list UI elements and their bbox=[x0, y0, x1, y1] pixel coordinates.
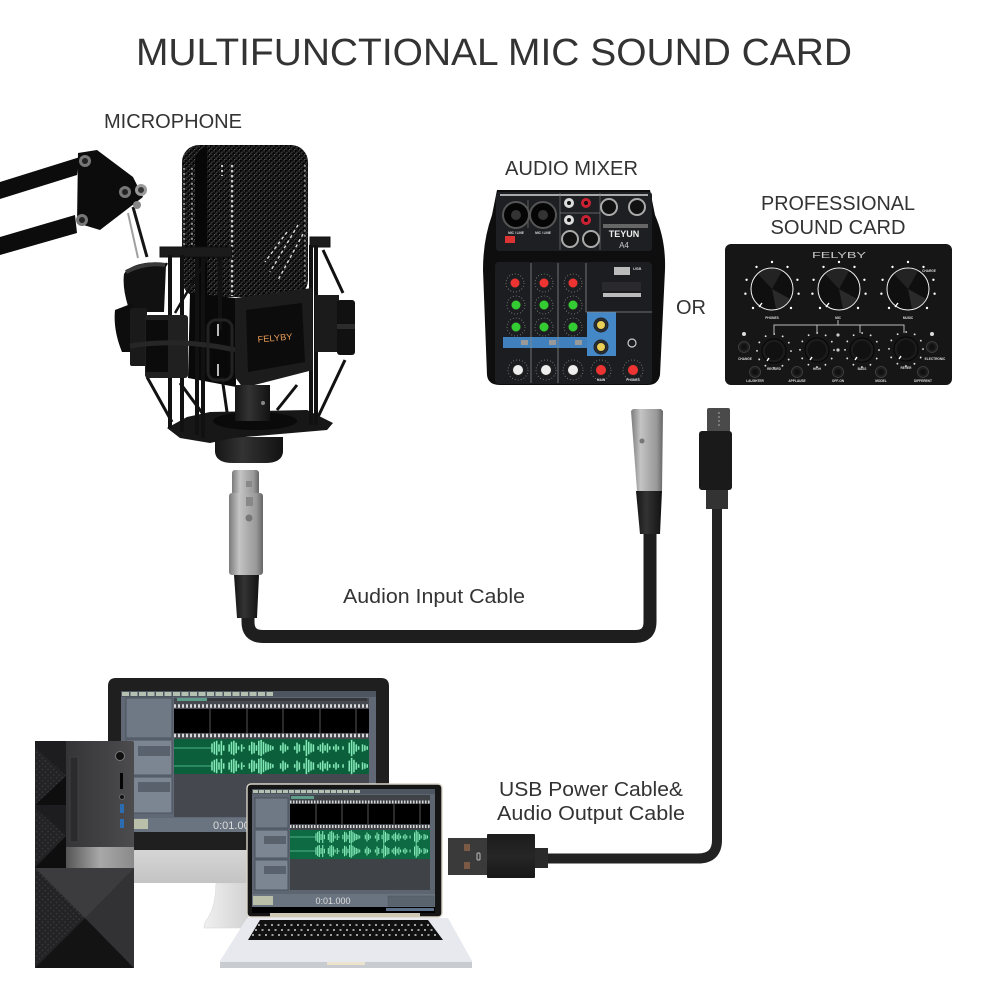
card control labels: MUSIC bbox=[903, 316, 914, 320]
main knobs bbox=[745, 262, 935, 310]
connector brackets bbox=[774, 320, 904, 333]
top input panel bbox=[496, 192, 652, 251]
card body bbox=[725, 244, 952, 385]
shock mount frame and rods bbox=[140, 237, 345, 433]
card control labels: MODEL bbox=[875, 379, 887, 383]
card control labels bbox=[738, 269, 946, 383]
channel strip panel: PHONES bbox=[626, 378, 640, 382]
label: audio mixer: AUDIO MIXER bbox=[505, 158, 638, 180]
top input panel: MIC / LINE bbox=[508, 231, 524, 235]
laptop screen bbox=[252, 789, 435, 913]
top input panel: MIC / LINE bbox=[535, 231, 551, 235]
optical drive bbox=[70, 757, 78, 842]
label: audio input cable: Audion Input Cable bbox=[343, 586, 525, 608]
card control labels: DIFFERENT bbox=[914, 379, 932, 383]
laptop lid bbox=[247, 784, 442, 917]
card control labels: APPLAUSE bbox=[788, 379, 806, 383]
card control labels: CHARGE bbox=[922, 269, 936, 273]
xlr female connector and audio input cable bbox=[229, 409, 663, 636]
lower diamond facets bbox=[35, 868, 134, 968]
male connector bbox=[631, 409, 663, 534]
card control labels: HIGH bbox=[813, 367, 822, 371]
desktop monitor bbox=[108, 678, 389, 928]
tower front panel bbox=[35, 741, 134, 968]
top input panel: A4 bbox=[619, 241, 629, 250]
label: usb power and audio output cable bbox=[497, 779, 685, 825]
label: professional sound card: PROFESSIONAL bbox=[761, 193, 915, 215]
card control labels: PHONES bbox=[765, 316, 779, 320]
monitor stand bbox=[204, 883, 252, 928]
top input panel: TEYUN bbox=[609, 229, 639, 239]
micro usb connector bbox=[699, 408, 732, 509]
usb type-a plug bbox=[448, 834, 548, 878]
laptop screen: 0:01.000 bbox=[315, 896, 351, 906]
hinge strip bbox=[270, 913, 420, 917]
label: usb power and audio output cable: USB Power Cable& bbox=[499, 779, 684, 801]
professional sound card bbox=[725, 244, 952, 385]
pc tower bbox=[35, 741, 134, 968]
usb cable with micro connector and type-a plug bbox=[448, 408, 732, 878]
channel strip panel: MAIN bbox=[597, 378, 606, 382]
monitor frame bbox=[108, 678, 389, 850]
female connector bbox=[229, 470, 263, 618]
title: MULTIFUNCTIONAL MIC SOUND CARD bbox=[136, 32, 852, 74]
mixer body bbox=[483, 190, 665, 385]
label: usb power and audio output cable: Audio Output Cable bbox=[497, 803, 685, 825]
mic body box with logo: FELYBY bbox=[257, 331, 293, 345]
monitor screen: 0:01.000 bbox=[213, 820, 256, 832]
card control labels: BASS bbox=[858, 367, 866, 371]
card logo: FELYBY bbox=[812, 251, 867, 260]
mount clamp block bbox=[130, 315, 235, 380]
label: microphone: MICROPHONE bbox=[104, 111, 242, 133]
card control labels: REVER bbox=[901, 366, 912, 370]
mount cylinder bbox=[115, 262, 166, 366]
laptop bbox=[220, 784, 472, 968]
mic body box with logo bbox=[235, 288, 313, 388]
card control labels: RECORD bbox=[767, 367, 782, 371]
right mount knob bbox=[315, 295, 355, 355]
silver band bbox=[66, 847, 134, 868]
laptop base bbox=[220, 918, 472, 968]
audio mixer bbox=[483, 190, 665, 385]
label: or: OR bbox=[676, 297, 706, 319]
upper left facets bbox=[35, 741, 66, 868]
card control labels: MIC bbox=[835, 316, 842, 320]
channel strip panel: USB bbox=[633, 266, 642, 271]
card control labels: CHANGE bbox=[738, 357, 752, 361]
channel strip panel bbox=[495, 262, 652, 384]
card control labels: OFF-ON bbox=[832, 379, 845, 383]
mic lower body behind mount bbox=[188, 293, 236, 387]
mount base plate and stem bbox=[167, 385, 333, 463]
label: professional sound card: SOUND CARD bbox=[770, 217, 906, 239]
boom arm bbox=[0, 150, 153, 307]
label: professional sound card bbox=[761, 193, 915, 239]
grille bbox=[182, 145, 308, 297]
card control labels: LAUGHTER bbox=[746, 379, 765, 383]
buttons bbox=[738, 332, 938, 378]
keyboard bbox=[248, 920, 443, 940]
microphone on boom arm with shock mount bbox=[0, 145, 355, 463]
card control labels: ELECTRONIC bbox=[925, 357, 946, 361]
monitor chin bbox=[108, 850, 389, 883]
small knobs bbox=[757, 332, 923, 368]
front ports bbox=[116, 752, 124, 828]
cable path bbox=[545, 505, 717, 858]
cable path bbox=[248, 530, 650, 636]
monitor screen bbox=[121, 691, 376, 832]
